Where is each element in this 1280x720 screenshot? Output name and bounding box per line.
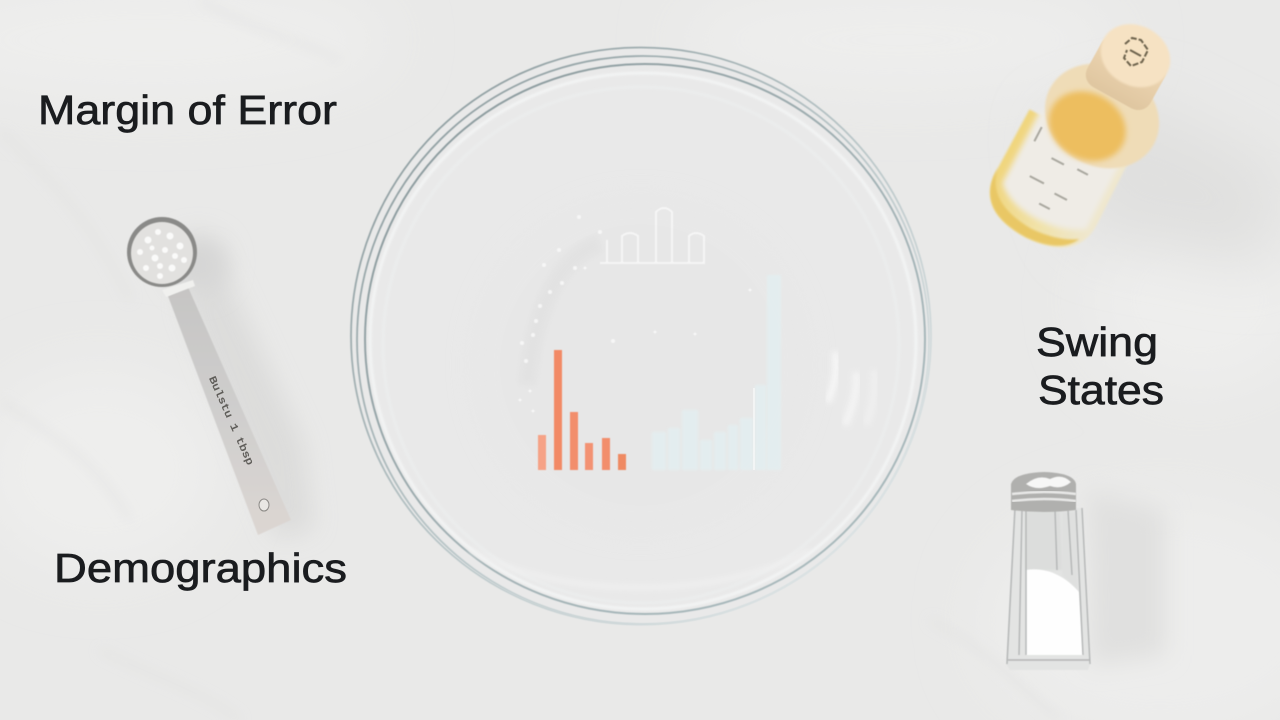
salt shaker [1006,472,1165,670]
chart: baseline [635,470,781,472]
spoon engraving: Bulstu 1 tbsp [205,375,255,467]
shaker salt [1026,569,1083,655]
label: Swing States [1036,319,1164,413]
cap symbol [1124,38,1148,66]
heading: Margin of Error: Margin of Error [38,87,337,133]
measuring spoon with salt [127,217,314,539]
label: Demographics: Demographics [54,545,347,591]
chart: grey arc band [527,243,600,385]
glass mixing bowl [351,48,931,625]
olive oil bottle [976,1,1280,270]
chart: dotted arc [518,215,752,412]
chart: orange bars [538,350,626,470]
label: Swing States: Swing [1036,319,1158,365]
bottle label [995,110,1126,242]
bottle cap [1081,31,1171,115]
bottle shoulder with oil [1026,44,1178,188]
chart: white highlight line [753,388,755,470]
label: Swing States: States [1038,367,1164,413]
bottle base oil [976,109,1130,264]
shaker glass [1006,508,1090,670]
chart: pale blue bars [652,275,781,470]
shaker metal lid [1011,472,1076,512]
chart: white outlined bars [600,208,705,263]
spoon hole [259,499,269,511]
